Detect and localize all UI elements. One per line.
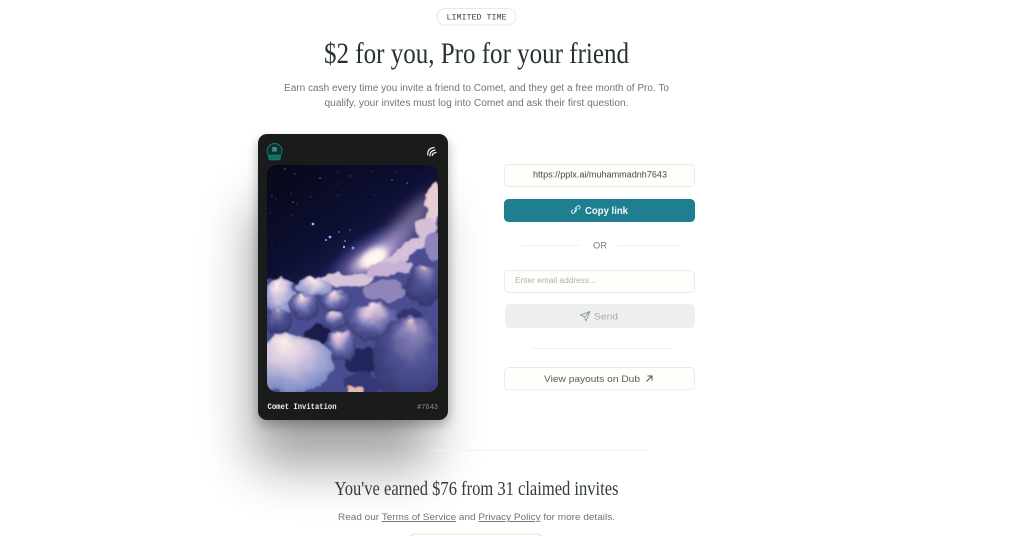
card number: #7643 (417, 404, 438, 412)
icon: external arrow (646, 376, 652, 382)
cropped bottom button (410, 534, 542, 536)
glow band (325, 224, 415, 276)
card label: Comet Invitation (268, 403, 337, 412)
stars (270, 168, 418, 245)
button: send (505, 304, 695, 328)
badge: limited time: LIMITED TIME (446, 14, 507, 22)
cloud mass (267, 180, 438, 392)
button: view payouts (504, 368, 694, 390)
title: $2 for you, Pro for your friend (324, 37, 629, 70)
field: invite link: https://pplx.ai/muhammadnh7643 (533, 170, 667, 180)
intro text: Earn cash every time you invite a friend to Comet, and they get a free month of Pro. To (284, 83, 669, 94)
button: copy link (504, 199, 695, 222)
field: email address: Enter email address... (515, 276, 596, 285)
earnings heading: You've earned $76 from 31 claimed invites (334, 478, 619, 500)
panel: invitation card (250, 134, 450, 420)
icon: card badge (267, 144, 282, 160)
icon: paper plane (580, 312, 590, 321)
divider: or: OR (593, 240, 607, 252)
button: send: Send (594, 312, 618, 322)
intro text: qualify, your invites must log into Comet and ask their first question. (324, 98, 628, 109)
button: copy link: Copy link (585, 206, 628, 217)
card image: galaxy above clouds (267, 165, 438, 392)
button: view payouts: View payouts on Dub (544, 374, 640, 385)
card drop shadow (252, 138, 450, 467)
bright blue stars (312, 223, 354, 249)
icon: link (572, 206, 580, 213)
field: invite link (504, 164, 694, 186)
terms text: Read our Terms of Service and Privacy Policy for more details. (338, 512, 615, 523)
intro text (284, 83, 669, 109)
badge: limited time (437, 8, 516, 25)
icon: contactless signal (428, 148, 436, 156)
field: email address (504, 270, 694, 292)
